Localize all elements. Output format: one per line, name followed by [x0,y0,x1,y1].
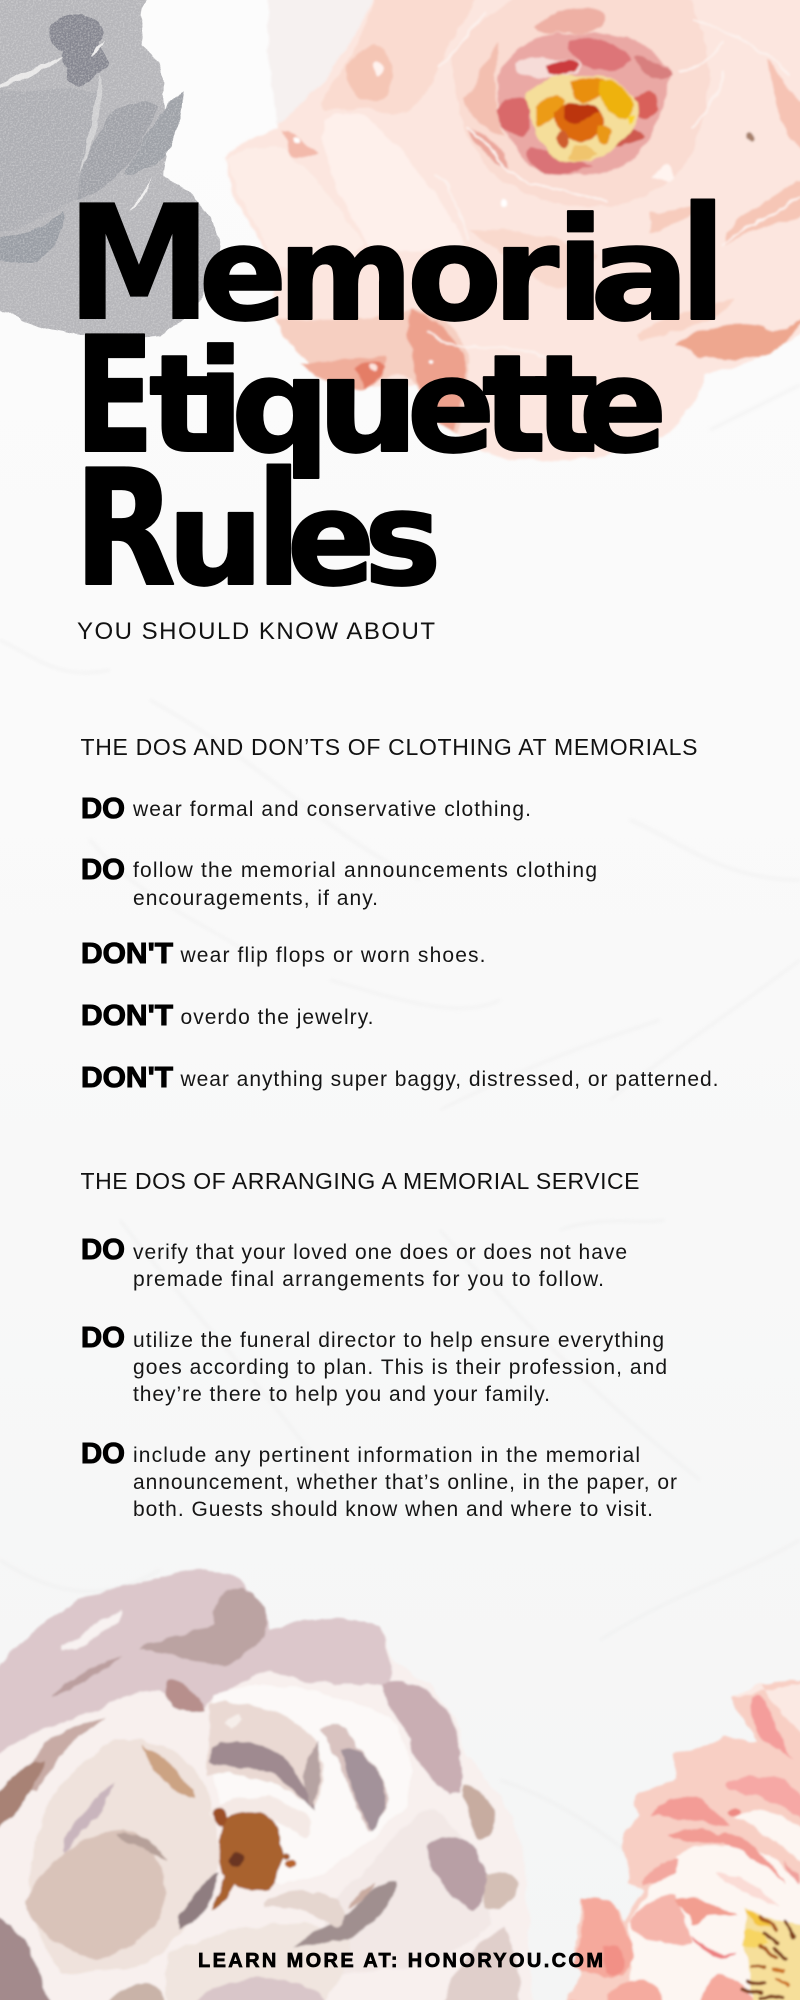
title line: Rules: es [287,463,441,615]
item: funeral director: utilize the funeral director to help ensure everything [133,1329,664,1352]
subtitle: YOU SHOULD KNOW ABOUT [77,618,435,645]
title line: Memorial: i [556,188,605,353]
panel: arranging a memorial service [80,1168,677,1521]
item: flip flops [81,938,486,970]
illustration: coral peony, bottom right [553,1680,800,2000]
title line: Etiquette: i [196,320,245,485]
title line: Rules: l [256,435,302,619]
illustration: grey watercolor leaf, top left [0,0,220,338]
title line: Etiquette: e [407,330,495,482]
item: jewelry: DON'T [81,1000,173,1032]
item: verify arrangements: verify that your loved one does or does not have [133,1241,627,1264]
title line: Rules: R [74,435,176,622]
item: baggy clothing: DON'T [81,1062,173,1094]
title line: Memorial: r [493,198,559,350]
title line: Memorial: o [407,198,502,350]
illustration: peach rose, top right [223,0,800,460]
item: formal clothing: DO [81,793,125,825]
item: funeral director: they’re there to help you and your family. [133,1383,550,1406]
rose veins [430,13,800,358]
item: jewelry [81,1000,374,1032]
item: pertinent information: DO [81,1438,125,1470]
item: baggy clothing [81,1062,718,1094]
illustration: mauve peony, bottom left [0,1570,535,2000]
item: announcements: DO [81,854,125,886]
item: verify arrangements: premade final arrangements for you to follow. [133,1268,604,1291]
rose centre stamens [527,74,637,164]
title line: Memorial: l [680,170,726,354]
title line: Memorial: M [66,170,212,357]
title line: Memorial: a [590,198,690,350]
title line: Etiquette: e [579,330,667,482]
item: pertinent information: include any pertinent information in the memorial [133,1444,640,1467]
title line: Etiquette: t [149,326,214,483]
footer: call to action: LEARN MORE AT: HONORYOU.COM [198,1950,603,1972]
item: announcements: follow the memorial announcements clothing [133,859,597,882]
title line: Etiquette: u [317,330,419,482]
item: funeral director: goes according to plan. This is their profession, and [133,1356,667,1379]
item: verify arrangements: DO [81,1234,125,1266]
title line: Etiquette: q [231,330,330,482]
title line: Memorial: m [278,198,413,350]
heading: arranging section: THE DOS OF ARRANGING A MEMORIAL SERVICE [80,1168,640,1194]
item: pertinent information: announcement, whether that’s online, in the paper, or [133,1471,677,1494]
coral peony stamens [742,1910,800,2000]
item: formal clothing [81,793,531,825]
item: pertinent information: both. Guests should know when and where to visit. [133,1498,653,1521]
title line: Etiquette: E [75,302,154,489]
item: formal clothing: wear formal and conservative clothing. [132,798,531,821]
item: announcements: encouragements, if any. [133,887,378,910]
item: funeral director: DO [81,1322,125,1354]
item: verify arrangements [81,1234,627,1291]
item: baggy clothing: wear anything super baggy, distressed, or patterned. [180,1068,718,1091]
title line: Etiquette: tt [482,326,599,483]
item: pertinent information [81,1438,677,1521]
panel: clothing dos and don'ts [80,734,718,1094]
title line: Rules: u [167,463,264,615]
title [66,170,726,622]
item: funeral director [81,1322,667,1406]
title line: Memorial: e [199,198,287,350]
item: flip flops: wear flip flops or worn shoes. [180,944,486,967]
item: announcements [81,854,597,910]
item: flip flops: DON'T [81,938,173,970]
item: jewelry: overdo the jewelry. [180,1006,374,1029]
rose silhouette [223,0,800,460]
peony centre [213,1807,297,1908]
heading: clothing section: THE DOS AND DON’TS OF CLOTHING AT MEMORIALS [80,734,698,760]
